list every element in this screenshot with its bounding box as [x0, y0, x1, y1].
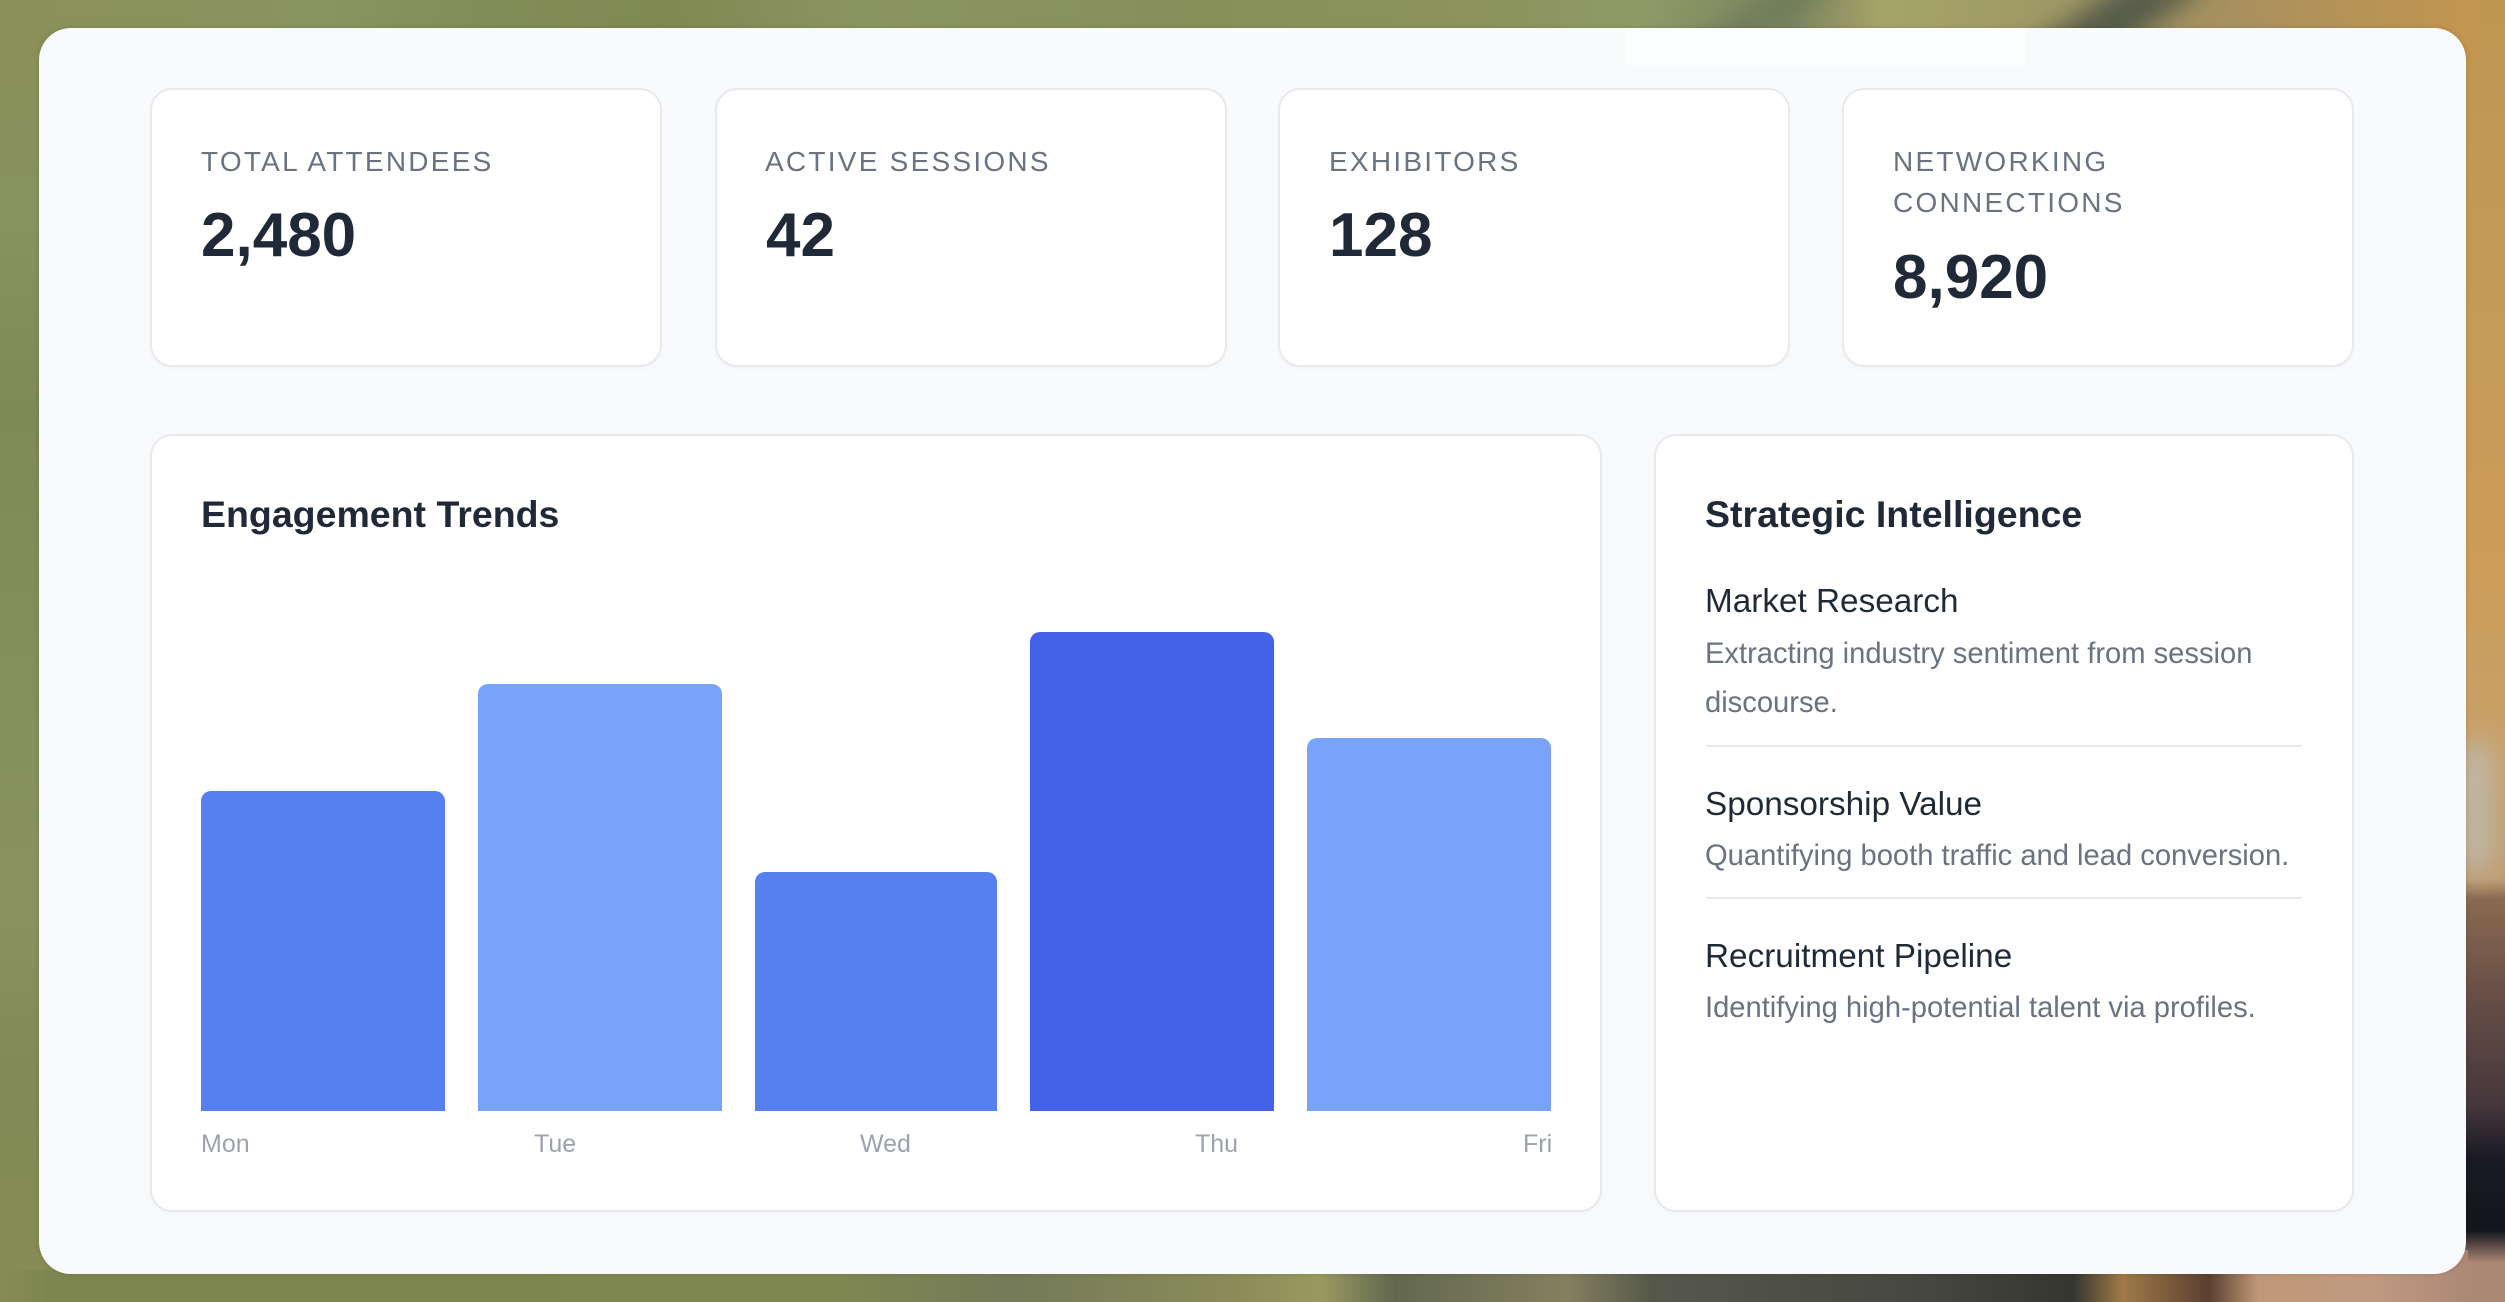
value: 42 — [766, 201, 835, 270]
item title: Market Research — [1705, 583, 1959, 620]
item description: Quantifying booth traffic and lead conversion. — [1705, 840, 2289, 872]
item: market research — [1705, 583, 2252, 719]
label: EXHIBITORS — [1329, 146, 1521, 177]
heading: strategic intelligence: Strategic Intelligence — [1705, 493, 2082, 535]
item description: Extracting industry sentiment from session — [1705, 638, 2252, 670]
item title: Recruitment Pipeline — [1705, 938, 2012, 975]
item: recruitment pipeline — [1705, 938, 2256, 1024]
item: sponsorship value — [1705, 786, 2289, 872]
axis label: Tue: Tue — [534, 1130, 576, 1158]
bar: Fri — [1307, 738, 1551, 1111]
item title: Sponsorship Value — [1705, 786, 1982, 823]
stat card: total attendees — [150, 88, 662, 367]
heading: engagement trends: Engagement Trends — [201, 493, 559, 535]
bar: Mon — [201, 791, 445, 1111]
stat card: networking connections — [1842, 88, 2354, 367]
stat card: exhibitors — [1278, 88, 1790, 367]
label — [1893, 146, 2125, 218]
label: ACTIVE SESSIONS — [765, 146, 1051, 177]
value: 128 — [1329, 201, 1432, 270]
bar: Thu — [1030, 632, 1274, 1111]
label: NETWORKING — [1893, 146, 2108, 177]
label: CONNECTIONS — [1893, 187, 2125, 218]
axis label: Fri: Fri — [1523, 1130, 1552, 1158]
bar chart — [201, 632, 1552, 1158]
panel: engagement trends — [150, 434, 1602, 1212]
value: 2,480 — [201, 201, 356, 270]
label: TOTAL ATTENDEES — [201, 146, 494, 177]
axis label: Wed: Wed — [860, 1130, 911, 1158]
item description continued: discourse. — [1705, 687, 1838, 719]
axis label: Mon: Mon — [201, 1130, 250, 1158]
value: 8,920 — [1893, 243, 2048, 312]
slanted dark bands — [1650, 0, 2490, 870]
bar: Tue — [478, 684, 722, 1111]
item description: Identifying high-potential talent via profiles. — [1705, 992, 2256, 1024]
stat card: active sessions — [715, 88, 1227, 367]
bar: Wed — [755, 872, 997, 1111]
panel: strategic intelligence — [1654, 434, 2354, 1212]
axis label: Thu: Thu — [1195, 1130, 1238, 1158]
